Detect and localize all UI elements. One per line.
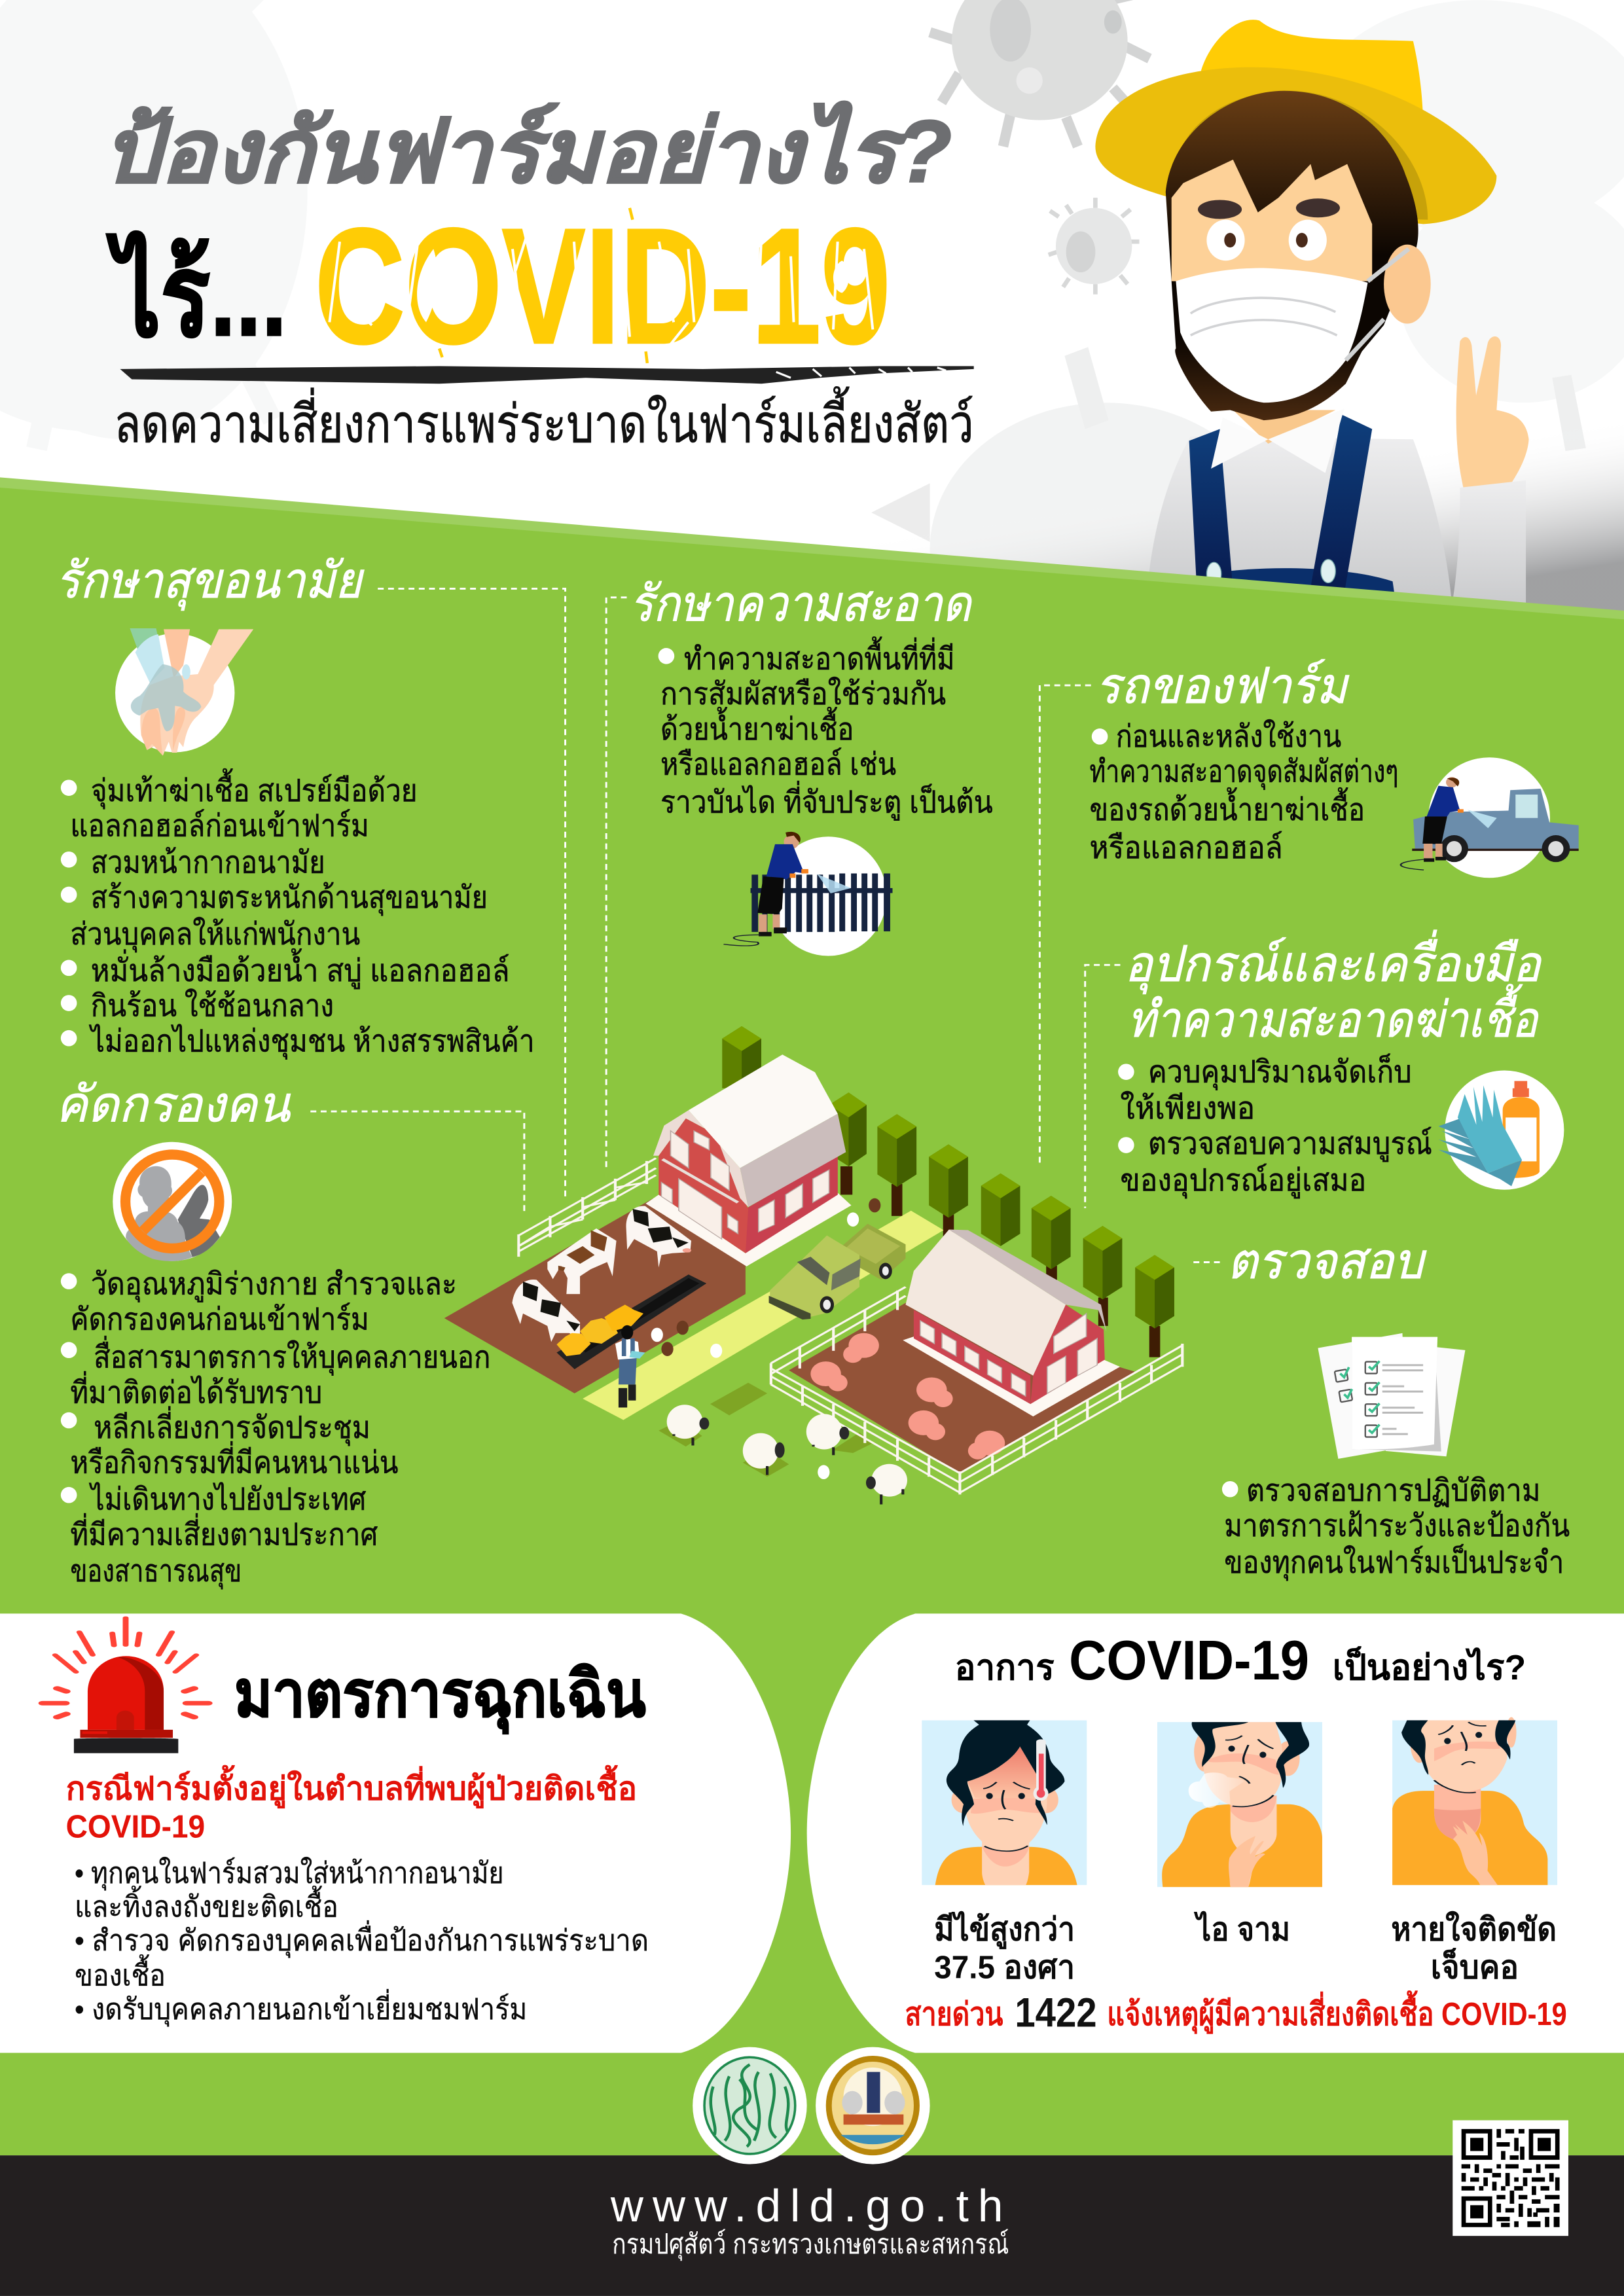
- icon: no people: [113, 1142, 232, 1261]
- text: emergency case: กรณีฟาร์มตั้งอยู่ในตำบลที่พบผู้ป่วยติดเชื้อ: [66, 1765, 637, 1809]
- text: inspection list: ของทุกคนในฟาร์มเป็นประจำ: [1224, 1543, 1564, 1581]
- footer: [0, 2155, 1624, 2296]
- text: hygiene list: แอลกอฮอล์ก่อนเข้าฟาร์ม: [70, 808, 369, 842]
- text: farm vehicle list: [1089, 719, 1398, 865]
- text: farm vehicle list: ทำความสะอาดจุดสัมผัสต่างๆ: [1089, 754, 1398, 791]
- title line 1: ป้องกันฟาร์มอย่างไร?: [103, 101, 952, 200]
- farmer illustration: [1095, 20, 1529, 622]
- text: emergency case: [66, 1765, 637, 1845]
- sheep: [667, 1405, 907, 1505]
- text: screening list: วัดอุณหภูมิร่างกาย สำรวจและ: [91, 1266, 457, 1303]
- farmer neck and collar: [1211, 408, 1344, 473]
- hair: [1166, 91, 1418, 420]
- heading: emergency: มาตรการฉุกเฉิน: [234, 1658, 646, 1734]
- labels: symptoms: [934, 1910, 1557, 1985]
- pigs: [810, 1333, 1005, 1460]
- farmer shirt: [1145, 437, 1453, 615]
- text: farm vehicle list: ของรถด้วยน้ำยาฆ่าเชื้อ: [1089, 787, 1365, 827]
- labels: symptoms: หายใจติดขัด: [1391, 1910, 1557, 1947]
- sleeve: [1450, 480, 1526, 618]
- text: emergency list: • สำรวจ คัดกรองบุคคลเพื่อป้องกันการแพร่ระบาด: [75, 1920, 649, 1958]
- text: screening list: คัดกรองคนก่อนเข้าฟาร์ม: [70, 1301, 369, 1336]
- text: hygiene list: สร้างความตระหนักด้านสุขอนามัย: [91, 880, 488, 916]
- icon: gloves and bottle: [1438, 1071, 1564, 1190]
- panel: equipment heading: [1125, 929, 1543, 1048]
- virus: top grey: [922, 0, 1149, 147]
- text: cleaning list: [659, 636, 993, 821]
- text: farm vehicle list: หรือแอลกอฮอล์: [1089, 830, 1283, 865]
- text: hygiene list: ส่วนบุคคลให้แก่พนักงาน: [70, 916, 360, 953]
- text: screening list: หลีกเลี่ยงการจัดประชุม: [94, 1406, 370, 1446]
- chickens: [651, 1198, 880, 1479]
- ear: [1384, 245, 1431, 323]
- text: farm vehicle list: ก่อนและหลังใช้งาน: [1116, 719, 1341, 753]
- text: inspection list: ตรวจสอบการปฏิบัติตาม: [1246, 1473, 1540, 1507]
- labels: symptoms: ไอ จาม: [1193, 1910, 1290, 1947]
- yard: cows: [444, 1198, 746, 1393]
- panel: emergency: [0, 1613, 791, 2053]
- farmer suspenders: [1189, 414, 1372, 593]
- panel: inspection heading: ตรวจสอบ: [1227, 1234, 1427, 1289]
- icon: siren: [43, 1618, 208, 1753]
- logo: livestock department: [693, 2047, 807, 2164]
- footer: website: www.dld.go.th: [610, 2180, 1003, 2231]
- text: cleaning list: หรือแอลกอฮอล์ เช่น: [660, 747, 896, 781]
- heading: symptoms: [955, 1630, 1526, 1692]
- cows: [512, 1206, 691, 1342]
- panel: symptoms: [807, 1613, 1624, 2053]
- text: screening list: [61, 1266, 490, 1590]
- heading: symptoms: อาการ: [955, 1648, 1055, 1687]
- farmer pants: [1172, 568, 1398, 622]
- text: inspection list: มาตรการเฝ้าระวังและป้องกัน: [1224, 1508, 1570, 1543]
- text: cleaning list: ด้วยน้ำยาฆ่าเชื้อ: [660, 707, 854, 746]
- icon: checklists: [1318, 1333, 1465, 1459]
- text: screening list: ที่มาติดต่อได้รับทราบ: [70, 1371, 322, 1409]
- text: hygiene list: จุ่มเท้าฆ่าเชื้อ สเปรย์มือด้วย: [91, 768, 418, 810]
- panel: equipment heading: อุปกรณ์และเครื่องมือ: [1125, 929, 1543, 994]
- text: screening list: ไม่เดินทางไปยังประเทศ: [88, 1482, 366, 1516]
- title: COVID-19 brush: COVID-19: [315, 195, 890, 378]
- title: no: ไร้...: [106, 230, 287, 359]
- hand peace sign: [1456, 336, 1529, 492]
- text: screening list: ของสาธารณสุข: [70, 1553, 242, 1590]
- text: equipment list: ตรวจสอบความสมบูรณ์: [1148, 1126, 1432, 1162]
- text: emergency list: [75, 1856, 649, 2027]
- text: inspection list: [1222, 1473, 1570, 1581]
- hotline: [905, 1990, 1567, 2036]
- text: equipment list: ให้เพียงพอ: [1120, 1090, 1255, 1125]
- qr code: [1453, 2120, 1568, 2236]
- icon: cleaning truck: [1401, 757, 1579, 878]
- panel: equipment heading: ทำความสะอาดฆ่าเชื้อ: [1128, 984, 1540, 1048]
- symptom: cough: [1157, 1722, 1322, 1887]
- shade above green: [732, 381, 1624, 619]
- virus: small grey: [1049, 198, 1140, 295]
- labels: symptoms: 37.5 องศา: [934, 1949, 1075, 1985]
- text: hygiene list: กินร้อน ใช้ช้อนกลาง: [91, 988, 334, 1023]
- text: cleaning list: การสัมผัสหรือใช้ร่วมกัน: [660, 676, 946, 711]
- fence: pig yard: [771, 1287, 1182, 1494]
- text: equipment list: ควบคุมปริมาณจัดเก็บ: [1148, 1052, 1412, 1090]
- mask: [1176, 249, 1409, 403]
- text: equipment list: [1118, 1052, 1432, 1199]
- hat: [1095, 20, 1496, 224]
- panel: farm vehicle heading: รถของฟาร์ม: [1095, 658, 1350, 714]
- text: emergency list: • งดรับบุคคลภายนอกเข้าเยี่ยมชมฟาร์ม: [75, 1989, 527, 2027]
- text: screening list: ที่มีความเสี่ยงตามประกาศ: [70, 1513, 378, 1551]
- farmer worker: [615, 1325, 645, 1408]
- trough and hay: [556, 1274, 706, 1369]
- barn: pigs: [903, 1229, 1120, 1416]
- footer: department: กรมปศุสัตว์ กระทรวงเกษตรและสหกรณ์: [612, 2229, 1009, 2261]
- logo: ministry: [816, 2047, 930, 2164]
- text: equipment list: ของอุปกรณ์อยู่เสมอ: [1120, 1162, 1366, 1199]
- text: emergency list: และทิ้งลงถังขยะติดเชื้อ: [75, 1886, 338, 1924]
- text: hygiene list: ไม่ออกไปแหล่งชุมชน ห้างสรรพสินค้า: [88, 1023, 535, 1060]
- grass patches: [659, 1383, 873, 1477]
- symptom illustrations: [922, 1717, 1557, 1887]
- text: cleaning list: ราวบันได ที่จับประตู เป็นต้น: [660, 781, 993, 821]
- green background: [0, 477, 1624, 2155]
- title underline brush: [120, 366, 974, 384]
- icon: cleaning fence: [723, 832, 893, 956]
- eyes: [1206, 220, 1327, 260]
- subtitle: ลดความเสี่ยงการแพร่ระบาดในฟาร์มเลี้ยงสัตว์: [114, 387, 974, 454]
- truck: [769, 1224, 905, 1319]
- barn: red: [645, 1054, 852, 1266]
- hotline: 1422: [1015, 1990, 1097, 2036]
- icon: washing hands: [115, 628, 253, 756]
- labels: symptoms: เจ็บคอ: [1431, 1947, 1519, 1985]
- text: emergency list: • ทุกคนในฟาร์มสวมใส่หน้ากากอนามัย: [75, 1856, 504, 1891]
- labels: symptoms: มีไข้สูงกว่า: [934, 1910, 1075, 1949]
- panel: cleaning heading: รักษาความสะอาด: [630, 577, 973, 632]
- text: emergency list: ของเชื้อ: [75, 1954, 166, 1992]
- decorative faint viruses: [0, 0, 1624, 696]
- text: hygiene list: หมั่นล้างมือด้วยน้ำ สบู่ แอลกอฮอล์: [91, 948, 510, 990]
- farmer buttons: [1206, 560, 1335, 586]
- symptom: throat: [1392, 1717, 1557, 1885]
- farm illustration: [444, 1026, 1182, 1505]
- eyebrows: [1198, 198, 1340, 219]
- road: [583, 1211, 944, 1420]
- face: [1172, 160, 1372, 281]
- heading: symptoms: COVID-19: [1069, 1630, 1309, 1692]
- text: screening list: สื่อสารมาตรการให้บุคคลภายนอก: [94, 1336, 490, 1376]
- fence: left: [518, 1158, 656, 1257]
- symptom: fever: [922, 1720, 1087, 1885]
- yard: pigs: [789, 1303, 1136, 1473]
- panel: hygiene heading: รักษาสุขอนามัย: [56, 553, 365, 611]
- trees back: [722, 1026, 1174, 1357]
- text: screening list: หรือกิจกรรมที่มีคนหนาแน่น: [70, 1441, 399, 1480]
- heading: symptoms: เป็นอย่างไร?: [1333, 1647, 1526, 1687]
- text: cleaning list: ทำความสะอาดพื้นที่ที่มี: [684, 636, 955, 675]
- hotline: สายด่วน: [905, 1996, 1003, 2032]
- text: emergency case: COVID-19: [66, 1809, 205, 1845]
- text: hygiene list: สวมหน้ากากอนามัย: [91, 844, 325, 879]
- panel: screening heading: คัดกรองคน: [56, 1077, 291, 1133]
- text: hygiene list: [61, 768, 535, 1060]
